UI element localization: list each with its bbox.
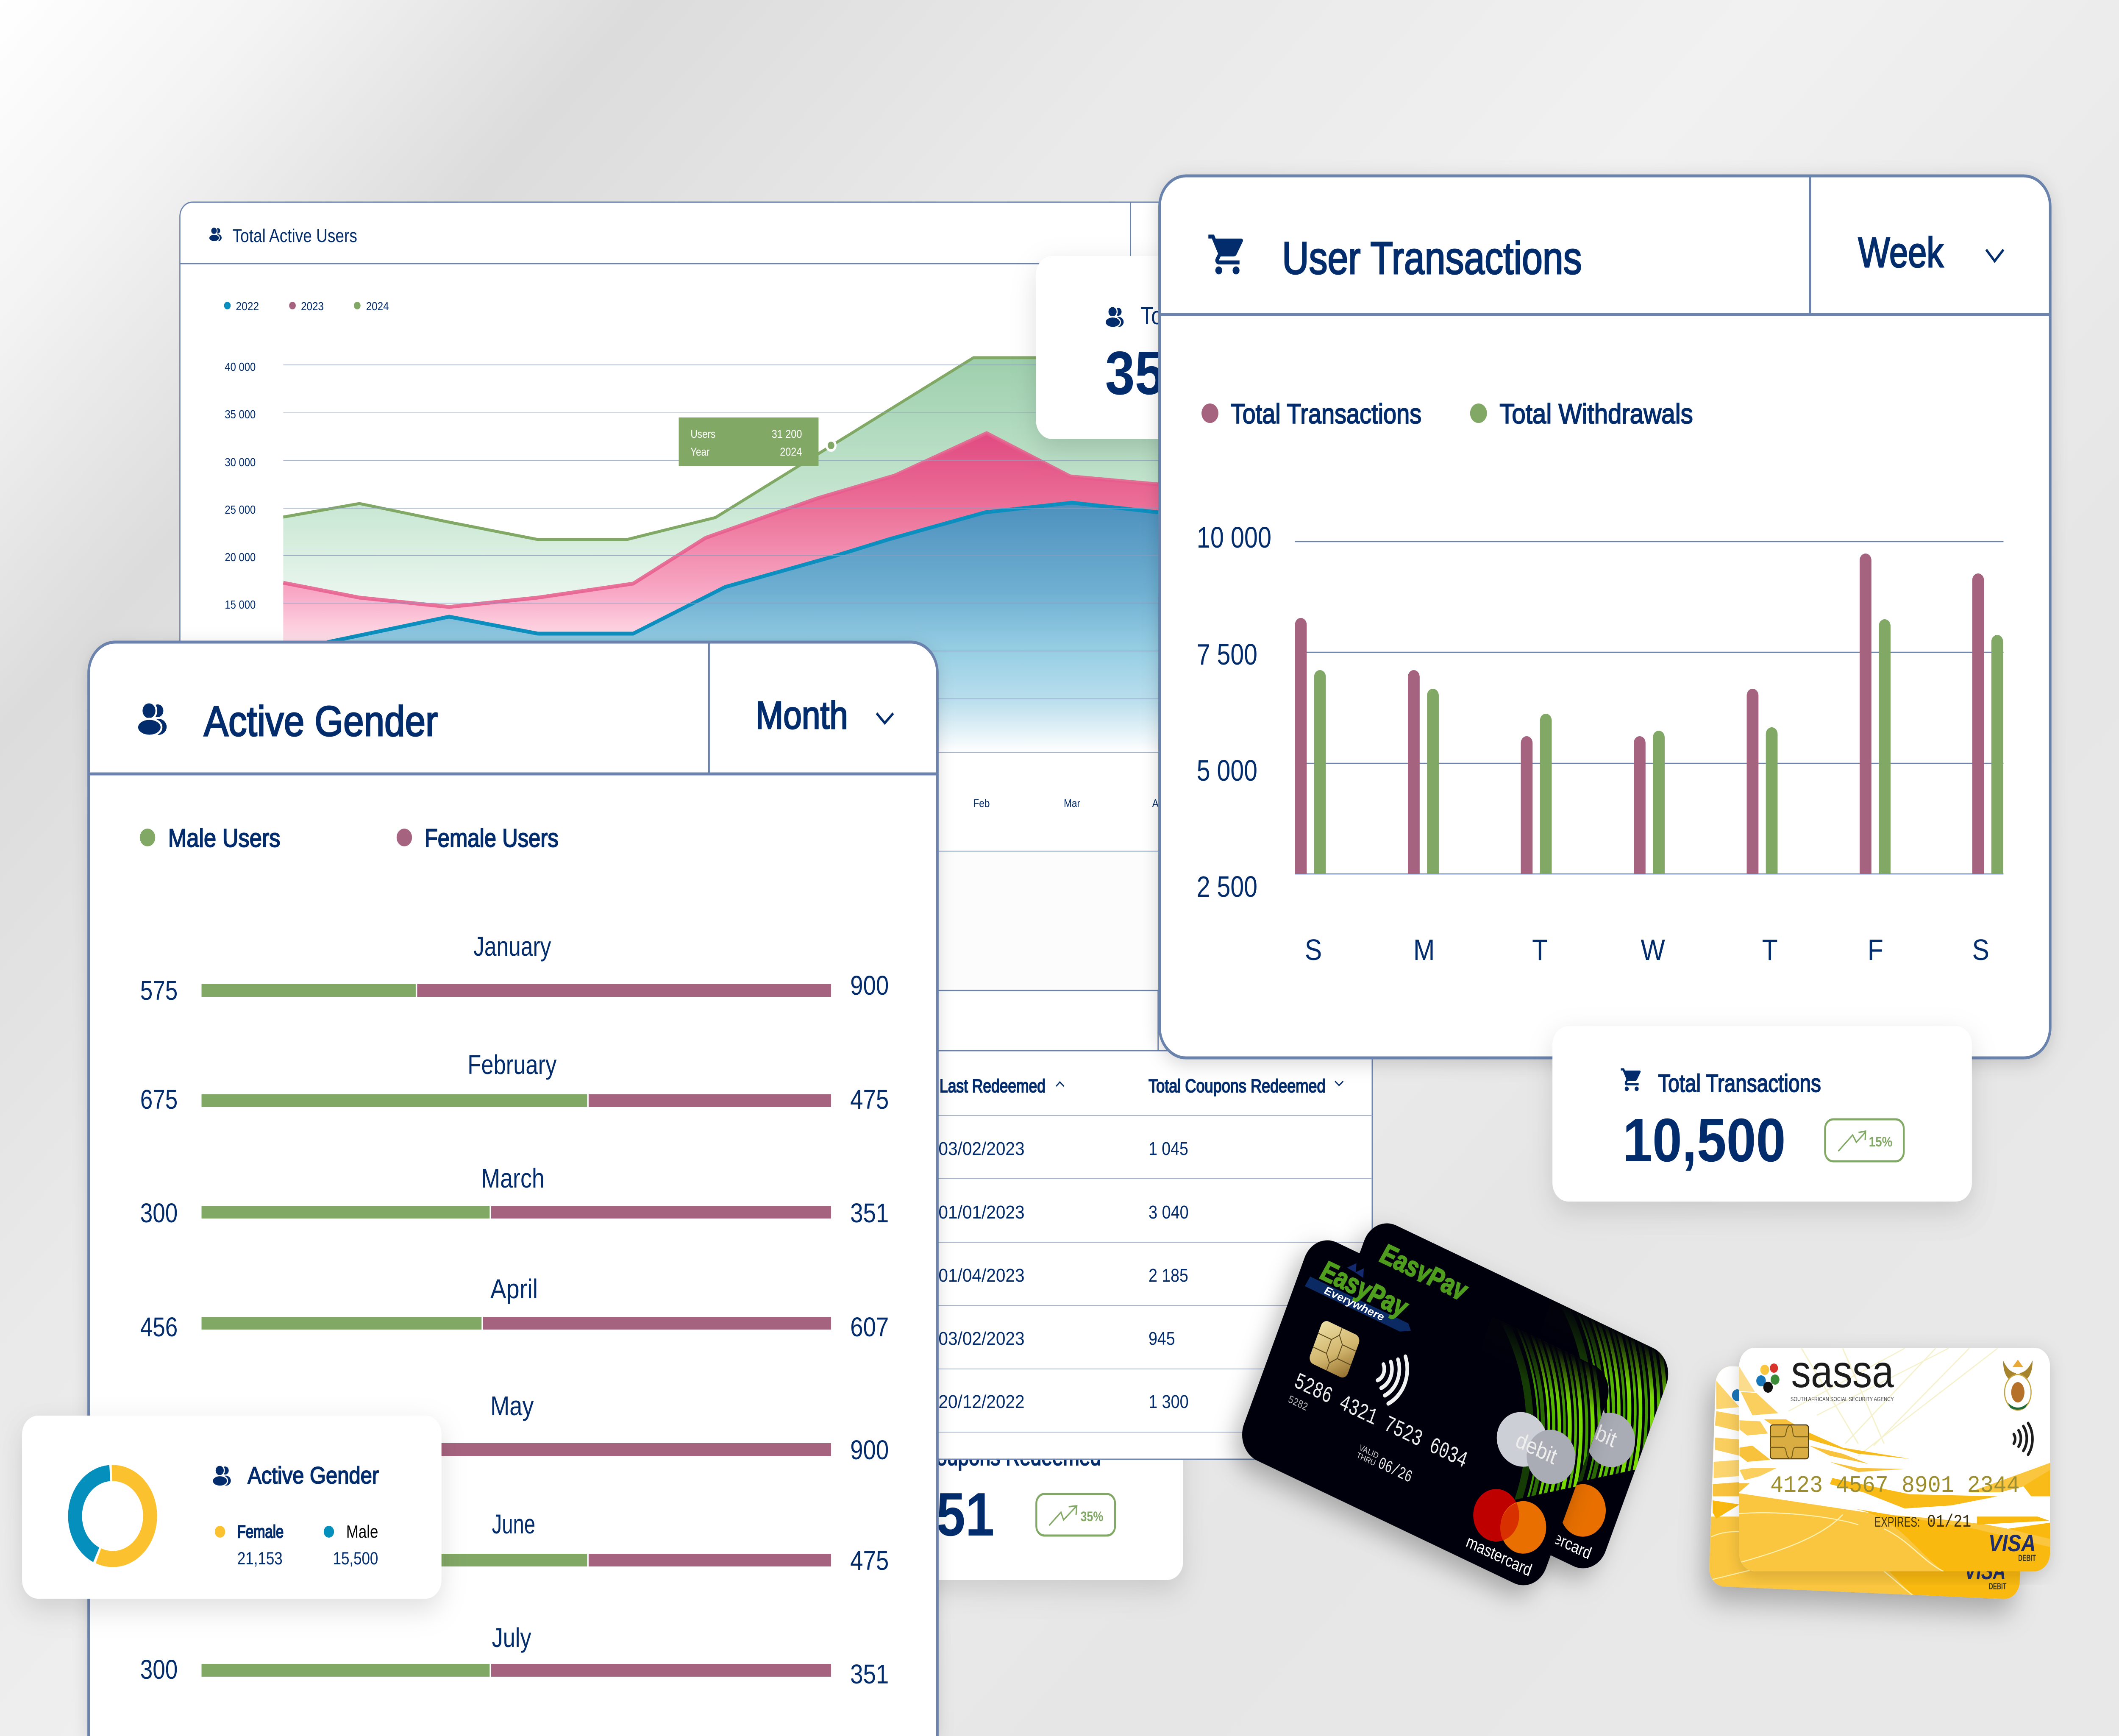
legend: female: Female: [237, 1522, 284, 1542]
tooltip: 2024: [780, 446, 802, 458]
y axis labels: 30 000: [225, 455, 256, 469]
SASSA tagline: SOUTH AFRICAN SOCIAL SECURITY AGENCY: [1791, 1395, 1894, 1402]
visa logo: VISA: [1988, 1530, 2036, 1557]
expiry: EXPIRES:: [1874, 1515, 1920, 1530]
legend: female: 21,153: [237, 1549, 283, 1569]
tooltip: [679, 417, 835, 466]
y axis labels: 10 000: [1197, 521, 1271, 554]
x axis labels: Apr: [1152, 798, 1167, 810]
row: February: 675: [140, 1084, 178, 1115]
row: March: 300: [140, 1198, 178, 1228]
debit label, back card: DEBIT: [1989, 1582, 2006, 1591]
table rows: 1 300: [1148, 1391, 1189, 1412]
heading: total active users: Total Active Users: [233, 225, 357, 246]
coat of arms: [2003, 1360, 2033, 1410]
heading: Active Gender: [247, 1463, 379, 1489]
illustration: EasyPay card, back: EasyPay: [1377, 1238, 1472, 1307]
illustration: EasyPay card, back: mastercard: [1523, 1515, 1594, 1564]
badge: 35%: [1036, 1494, 1115, 1536]
label: Total: [1140, 302, 1185, 330]
row: March: 351: [850, 1198, 889, 1228]
card pattern: [1022, 1053, 1676, 1736]
x axis labels: F: [1868, 933, 1883, 966]
dropdown: week: [1858, 228, 2003, 276]
x axis labels: S: [1305, 933, 1322, 966]
table rows: 03/02/2023: [938, 1328, 1025, 1349]
table rows: 03/02/2023: [938, 1138, 1025, 1159]
table rows: 1 045: [1148, 1138, 1188, 1159]
valid thru: VALID: [1358, 1443, 1380, 1460]
x axis labels: S: [1972, 933, 1989, 966]
row: June: 475: [850, 1545, 889, 1576]
badge: 15%: [1825, 1119, 1904, 1161]
illustration: EasyPay card, back: debit: [1572, 1410, 1620, 1452]
valid thru: [1354, 1443, 1415, 1488]
bar chart: [1295, 542, 2003, 874]
visa logo, back card: VISA: [1964, 1557, 2006, 1585]
row: February: February: [467, 1049, 556, 1080]
card number: 5286 4321 7523 6034: [1291, 1369, 1471, 1474]
row: June: [202, 1509, 889, 1576]
legend: male and female users: [140, 824, 559, 852]
row: May: 900: [850, 1435, 889, 1465]
y axis labels: 20 000: [225, 550, 256, 564]
illustration: SASSA card, back: [1708, 1363, 2044, 1602]
row: March: March: [481, 1163, 545, 1194]
table rows: 2 185: [1148, 1265, 1188, 1286]
x axis labels: [973, 798, 1167, 810]
hands logo fragment: [1732, 1389, 1742, 1401]
row: January: [140, 931, 889, 1006]
legend: male and female users: Female Users: [425, 824, 559, 852]
row: May: [202, 1391, 889, 1465]
tooltip: Year: [690, 446, 709, 458]
SASSA wordmark: sassa: [1791, 1346, 1894, 1397]
legend: Total Withdrawals: [1499, 398, 1693, 430]
icon: cart: [1208, 234, 1243, 274]
row: July: July: [492, 1622, 531, 1653]
valid thru: THRU: [1355, 1450, 1377, 1468]
card: total active users: [1036, 256, 1220, 439]
tooltip: Users: [690, 428, 715, 440]
value: 35: [1105, 339, 1165, 407]
x axis labels: M: [1413, 933, 1435, 966]
spacer panel between chart and table: [883, 851, 1214, 990]
table rows: 20/12/2022: [938, 1391, 1025, 1412]
illustration: EasyPay card, front: [1223, 1238, 1610, 1606]
legend: years: 2022: [236, 299, 259, 313]
card: total coupons redeemed: [809, 1314, 1183, 1580]
table header: Last Redeemed: [940, 1075, 1046, 1096]
y axis labels: 7 500: [1197, 638, 1257, 671]
donut chart: [75, 1473, 150, 1559]
legend: years: 2024: [366, 299, 389, 313]
debit hologram: [1488, 1403, 1584, 1493]
row: July: 300: [140, 1654, 178, 1685]
row: July: [140, 1622, 889, 1689]
card: active gender donut: [22, 1416, 442, 1599]
heading: user transactions: User Transactions: [1282, 233, 1582, 284]
y axis labels: [225, 360, 256, 611]
legend: male: 15,500: [333, 1549, 378, 1569]
icon: users: [209, 227, 222, 242]
row: January: 900: [850, 970, 889, 1001]
chip: [1308, 1319, 1361, 1380]
y axis labels: 15 000: [225, 598, 256, 611]
y axis labels: 40 000: [225, 360, 256, 373]
x axis labels: Feb: [973, 798, 990, 810]
table rows: 01/01/2023: [938, 1202, 1025, 1223]
x axis labels: T: [1532, 933, 1548, 966]
legend: Total Transactions: [1231, 398, 1421, 430]
row: April: [140, 1274, 889, 1342]
illustration: EasyPay card, back: [1344, 1221, 1670, 1589]
visa logo: DEBIT: [2018, 1553, 2036, 1563]
value: 51: [936, 1480, 994, 1549]
table rows: 3 040: [1148, 1202, 1189, 1223]
heading: active gender: Active Gender: [204, 697, 438, 745]
icon: users: [137, 702, 167, 736]
legend: years: 2023: [301, 299, 324, 313]
row: May: May: [490, 1391, 534, 1421]
y axis labels: 25 000: [225, 503, 256, 516]
legend: years: [224, 299, 389, 313]
debit hologram: debit: [1513, 1427, 1560, 1469]
illustration: SASSA card, front: [1739, 1346, 2050, 1571]
y axis labels: 2 500: [1197, 870, 1257, 903]
value: 10,500: [1623, 1106, 1786, 1174]
panel: coupons table: [846, 990, 1372, 1459]
row: March: [140, 1163, 889, 1228]
row: February: 475: [850, 1084, 889, 1115]
valid thru: 06/26: [1375, 1454, 1415, 1488]
x axis labels: [1305, 933, 1989, 966]
label: Total Transactions: [1658, 1070, 1821, 1097]
icon: contactless: [1372, 1349, 1413, 1408]
table header: Total Coupons Redeemed: [1148, 1075, 1326, 1096]
table header: [940, 1075, 1343, 1096]
row: January: 575: [140, 975, 178, 1006]
row: July: 351: [850, 1659, 889, 1689]
legend: male: Male: [346, 1522, 378, 1542]
dropdown: week: Week: [1858, 228, 1944, 276]
row: April: April: [490, 1274, 538, 1304]
table rows: 945: [1148, 1328, 1175, 1349]
x axis labels: W: [1641, 933, 1665, 966]
table rows: 01/04/2023: [938, 1265, 1025, 1286]
card: total transactions: [1552, 1026, 1972, 1202]
row: June: June: [492, 1509, 535, 1539]
dropdown: month: Month: [756, 694, 848, 737]
chip: [1770, 1425, 1808, 1459]
panel: user transactions: [1160, 176, 2050, 1058]
card small number: 5282: [1286, 1394, 1309, 1414]
EasyPay logo: EasyPay: [1317, 1255, 1412, 1324]
x axis labels: T: [1762, 933, 1778, 966]
row: April: 607: [850, 1312, 889, 1342]
table rows: [846, 1116, 1372, 1432]
row: January: January: [473, 931, 551, 962]
tooltip: 31 200: [772, 428, 802, 440]
y axis labels: [1197, 521, 1271, 903]
badge: 15%: 15%: [1869, 1135, 1892, 1149]
legend: [1201, 398, 1693, 430]
row: April: 456: [140, 1312, 178, 1342]
icon: users: [212, 1465, 231, 1486]
icon: cart: [1621, 1068, 1641, 1091]
y axis labels: 35 000: [225, 407, 256, 421]
expiry: 01/21: [1927, 1512, 1971, 1532]
dropdown: month: [756, 694, 893, 737]
EasyPay logo: Everywhere: [1323, 1284, 1386, 1324]
x axis labels: Mar: [1064, 798, 1080, 810]
icon: contactless: [2014, 1423, 2033, 1455]
legend: female: [215, 1522, 284, 1569]
icon: users: [1105, 306, 1123, 328]
mastercard logo: mastercard: [1464, 1532, 1534, 1580]
row: February: [140, 1049, 889, 1115]
legend: male: [324, 1522, 378, 1569]
legend: male and female users: Male Users: [168, 824, 280, 852]
label: Total Coupons Redeemed: [876, 1443, 1101, 1471]
area chart: [283, 358, 1214, 752]
badge: 35%: 35%: [1080, 1509, 1103, 1524]
expiry: [1874, 1512, 1971, 1532]
mastercard logo: [1460, 1480, 1553, 1581]
panel: active gender: [89, 642, 937, 1736]
y axis labels: 5 000: [1197, 754, 1257, 787]
SASSA logo: hands: [1756, 1363, 1780, 1393]
panel: total active users chart: [180, 202, 1284, 851]
card number: 4123 4567 8901 2344: [1770, 1472, 2020, 1499]
